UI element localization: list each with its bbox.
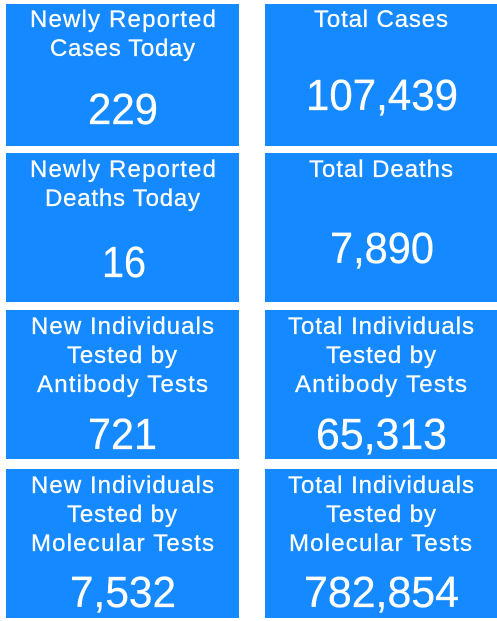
number: 229: 229 — [88, 85, 158, 134]
panel: newly reported deaths today — [6, 153, 239, 302]
heading: total individuals tested by molecular tests — [288, 472, 474, 557]
panel: new individuals tested by molecular tests — [6, 469, 239, 618]
heading: new individuals tested by molecular tests: Tested by — [67, 501, 177, 528]
heading: newly reported deaths today: Deaths Today — [45, 185, 200, 212]
number: 721: 721 — [88, 410, 157, 459]
heading: new individuals tested by molecular tests: New Individuals — [31, 472, 214, 499]
heading: total individuals tested by antibody tests — [288, 313, 474, 398]
heading: total individuals tested by molecular tests: Molecular Tests — [289, 530, 472, 557]
heading: newly reported cases today: Cases Today — [50, 35, 195, 62]
number: 7,532: 7,532 — [70, 568, 176, 617]
panel: total deaths — [265, 153, 497, 302]
heading: total individuals tested by antibody tests: Total Individuals — [288, 313, 474, 340]
number: 7,890: 7,890 — [330, 224, 434, 273]
heading: new individuals tested by antibody tests: Antibody Tests — [37, 371, 208, 398]
heading: total individuals tested by antibody tests: Antibody Tests — [295, 371, 467, 398]
heading: new individuals tested by antibody tests: Tested by — [67, 342, 177, 369]
heading: total cases: Total Cases — [314, 6, 448, 33]
panel: newly reported cases today — [6, 4, 239, 146]
panel: total cases — [265, 4, 497, 146]
heading: newly reported cases today — [30, 6, 216, 62]
heading: total individuals tested by molecular tests: Total Individuals — [288, 472, 474, 499]
panel: total individuals tested by molecular tests — [265, 469, 497, 618]
panel: new individuals tested by antibody tests — [6, 310, 239, 459]
heading: newly reported deaths today — [30, 156, 216, 212]
heading: newly reported cases today: Newly Reported — [30, 6, 216, 33]
heading: total individuals tested by molecular tests: Tested by — [326, 501, 436, 528]
heading: new individuals tested by antibody tests — [31, 313, 214, 398]
heading: new individuals tested by molecular tests — [31, 472, 214, 557]
number: 782,854: 782,854 — [304, 568, 459, 617]
heading: new individuals tested by antibody tests: New Individuals — [31, 313, 214, 340]
heading: total individuals tested by antibody tests: Tested by — [326, 342, 436, 369]
heading: new individuals tested by molecular tests: Molecular Tests — [31, 530, 214, 557]
panel: total individuals tested by antibody tests — [265, 310, 497, 459]
number: 65,313: 65,313 — [316, 410, 447, 459]
number: 16: 16 — [102, 238, 146, 287]
heading: newly reported deaths today: Newly Reported — [30, 156, 216, 183]
heading: total deaths: Total Deaths — [309, 156, 453, 183]
number: 107,439: 107,439 — [306, 71, 458, 120]
